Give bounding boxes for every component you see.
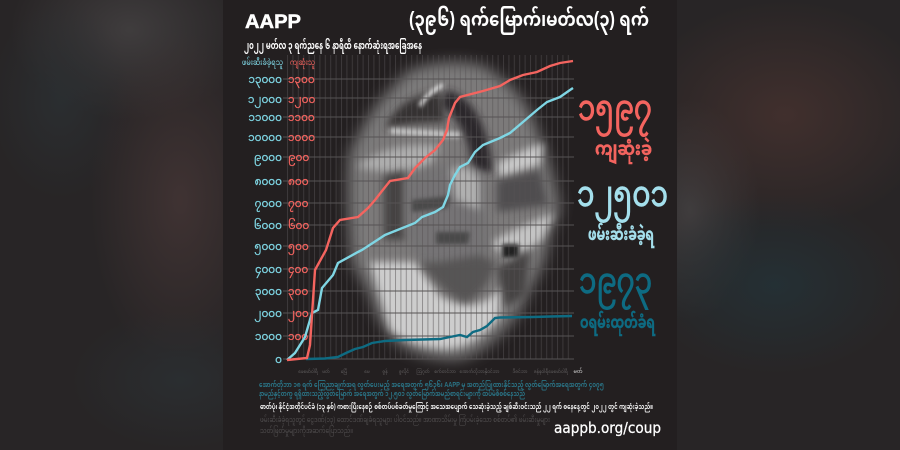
killed axis numbers: ၁၂၀၀ — [288, 94, 315, 108]
killed axis header: ကျဆုံးသူ — [290, 57, 315, 70]
note: grey text — [260, 414, 550, 437]
month labels: မေ — [364, 369, 370, 374]
arrested axis numbers: ၉၀၀၀ — [254, 152, 282, 166]
stat: arrested: ၁၂၅၀၁ — [577, 173, 668, 223]
blurred background, left side — [34, 0, 223, 402]
blurred background, right side — [677, 33, 892, 330]
killed axis numbers: ၁၃၀၀ — [288, 74, 315, 88]
month labels: စက်တင်ဘာ — [434, 369, 456, 374]
month labels: အောက်တိုဘာ — [460, 369, 485, 375]
month labels: ဇူလိုင် — [399, 369, 409, 375]
arrested axis numbers: ၁၂၀၀၀ — [248, 94, 282, 108]
killed axis numbers: ၇၀၀ — [288, 198, 309, 212]
stat: warrants: ၁၉၇၃ — [579, 260, 652, 310]
stat: killed: ကျဆုံးခဲ့ — [595, 136, 652, 165]
month labels: နိုဝင်ဘာ — [484, 369, 499, 375]
arrested axis numbers: ၀ — [275, 354, 282, 366]
website url: aappb.org/coup — [554, 419, 661, 437]
month labels: ဇန်နဝါရီ — [534, 369, 549, 375]
killed axis numbers: ၆၀၀ — [288, 218, 309, 232]
killed axis numbers: ၄၀၀ — [288, 264, 308, 278]
blurred portrait photo — [348, 62, 560, 359]
killed axis numbers: ၉၀၀ — [288, 152, 309, 166]
stat: warrants — [579, 260, 656, 336]
stat: arrested — [577, 173, 668, 248]
killed axis numbers: ၁၀၀ — [288, 331, 308, 343]
arrested axis numbers: ၄၀၀၀ — [255, 264, 282, 278]
line: arrested — [287, 88, 573, 360]
month labels: ဖေဖော်ဝါရီ — [298, 369, 319, 375]
killed axis numbers — [288, 74, 315, 343]
month labels: ဧပြီ — [341, 369, 347, 375]
logo: AAPP: AAPP — [245, 12, 301, 33]
killed axis numbers: ၃၀၀ — [288, 286, 308, 300]
note: grey text: ဖမ်းဆီးခံခဲ့ရသူတွင် ငွေဒဏ်(၁၃) ထောင်ဒဏ်ချခံရသူများ ပါဝင်သည်။ အာဏာသိမ်းမှု ကြံပမ်းခဲ့သော စစ်တပ်၏ ဖမ်းဆီးမှုများ — [260, 414, 550, 426]
note: source text in teal: နာမည်နှင့်တကွ ရရှိထားသည့်လွတ်မြောက် အရေအတွက် ၁၂,၅၀၁ လွတ်မြောက်အမည်စာရင်းများကို ထပ်မံစိစစ်နေသည် — [259, 389, 525, 400]
arrested axis header: ဖမ်းဆီးခံခဲ့ရသူ — [242, 55, 283, 69]
killed axis numbers: ၈၀၀ — [288, 176, 309, 188]
month labels: မတ် — [573, 367, 583, 375]
killed axis numbers: ၂၀၀ — [288, 308, 309, 322]
arrested axis numbers: ၁၃၀၀၀ — [248, 74, 282, 88]
killed axis numbers: ၁၁၀၀ — [288, 112, 315, 124]
month labels: ဩဂုတ် — [416, 369, 430, 375]
arrested axis numbers: ၁၁၀၀၀ — [248, 112, 282, 124]
month labels: ဒီဇင်ဘာ — [512, 369, 528, 374]
title: (၃၉၆) ရက်မြောက်၊မတ်လ(၃) ရက် — [409, 6, 649, 35]
arrested axis numbers: ၁၀၀၀ — [255, 331, 282, 343]
stat: killed — [578, 87, 652, 165]
arrested axis numbers: ၁၀၀၀၀ — [248, 132, 282, 144]
stat: arrested: ဖမ်းဆီးခံခဲ့ရ — [588, 222, 655, 248]
killed axis numbers: ၅၀၀ — [288, 241, 309, 255]
vertical and horizontal chart grid — [283, 55, 574, 359]
arrested axis numbers: ၇၀၀၀ — [255, 198, 282, 212]
note: white text: ဓာတ်ပုံ၊ နိုင်ငံ့အတိုင်ပင်ခံ (၁၃ နှစ်) ကစားပြီးနေစဉ် စစ်တပ်ပစ်ခတ်မှုကြောင့် အသေအပျောက် သေဆုံးခဲ့သည့် ချစ်ဆီးဝင်းသည် ၂၂ ရက် စနေနေ့တွင် ၂၀၂၂ တွင် ကျဆုံးခဲ့သည်။ — [260, 402, 653, 413]
note: source text in teal: အောက်တိုဘာ ၁၈ ရက် ကြေညာချက်အရ လွတ်ပေးမည့် အရေအတွက် ၅၆၃၆၊ AAPP မှ အတည်ပြုထားနိုင်သည့် လွတ်မြောက်အရေအတွက် ၄၀၇၅ — [259, 380, 604, 391]
arrested axis numbers: ၂၀၀၀ — [254, 308, 282, 322]
centre panel — [223, 0, 677, 450]
arrested axis numbers — [248, 74, 282, 366]
stat: killed: ၁၅၉၇ — [578, 87, 652, 137]
note: source text in teal — [259, 380, 604, 400]
arrested axis numbers: ၆၀၀၀ — [254, 218, 282, 232]
month labels — [298, 367, 583, 375]
month labels: ဖေဖော်ဝါရီ — [548, 369, 569, 375]
arrested axis numbers: ၃၀၀၀ — [255, 286, 282, 300]
subtitle: ၂၀၂၂ မတ်လ ၃ ရက်ညနေ ၆ နာရီထိ နောက်ဆုံးရအခြေအနေ — [244, 38, 422, 55]
line: killed — [287, 61, 573, 360]
note: grey text: သတ်ဖြတ်မှုများကိုအဆက်ပြောသည်။ — [260, 425, 353, 437]
month labels: ဇွန် — [382, 369, 388, 375]
killed axis numbers: ၁၀၀၀ — [288, 132, 315, 144]
arrested axis numbers: ၈၀၀၀ — [255, 176, 282, 188]
line: warrants issued — [306, 316, 572, 359]
stat: warrants: ဝရမ်းထုတ်ခံရ — [580, 310, 656, 336]
arrested axis numbers: ၅၀၀၀ — [254, 241, 282, 255]
month labels: မတ် — [322, 369, 330, 374]
